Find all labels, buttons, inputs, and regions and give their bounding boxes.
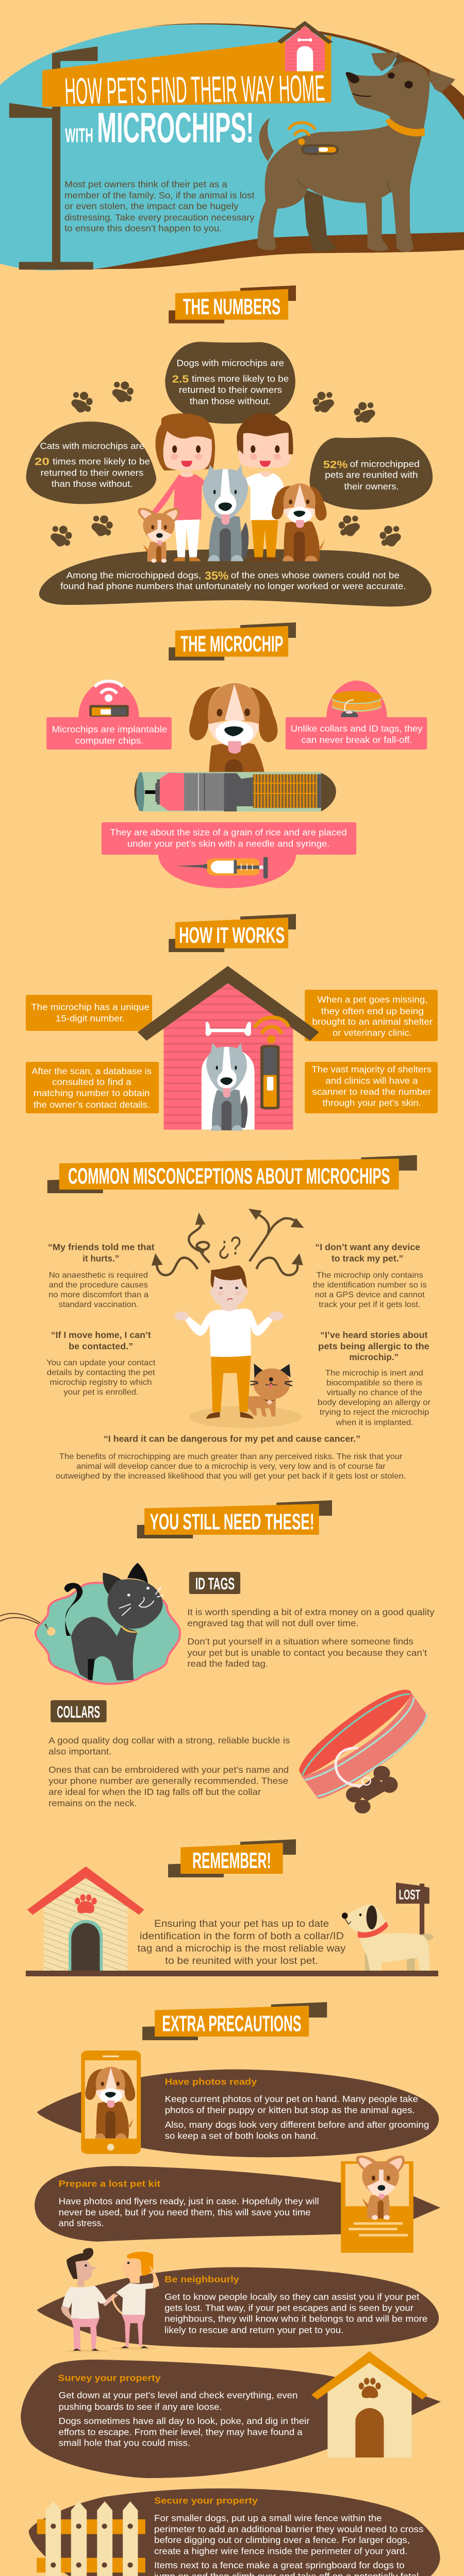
collars label <box>51 1700 107 1722</box>
dogs in family <box>138 465 327 563</box>
step: database: consulted to find a <box>52 1077 132 1087</box>
misconception: it hurts: it hurts.” <box>82 1253 119 1264</box>
stat bubble: reunited <box>309 437 433 510</box>
step: scanners <box>305 1062 438 1113</box>
remember text: tag and a microchip is the most reliable way <box>137 1942 346 1954</box>
misconception: it hurts: and the procedure causes <box>49 1280 148 1290</box>
id tag with cat <box>0 1563 180 1684</box>
lost dog <box>342 1905 434 1971</box>
remember text: identification in the form of both a collar/ID <box>140 1930 344 1941</box>
misconception: it hurts: “My friends told me that <box>48 1242 155 1252</box>
section: the numbers: THE NUMBERS <box>183 294 280 319</box>
remember text: Ensuring that your pet has up to date <box>154 1918 329 1929</box>
family with dogs <box>138 413 327 563</box>
heading: extra precautions <box>142 2002 327 2040</box>
stat bubble: cats: Cats with microchips are <box>40 442 144 451</box>
step: pet goes missing: or veterinary clinic. <box>333 1028 412 1038</box>
tip: be neighbourly <box>37 2248 439 2352</box>
stat bubble: dogs: 2.5 <box>172 374 189 385</box>
misconception: cancer <box>56 1434 406 1481</box>
kennel illustration <box>138 966 319 1131</box>
stat bubble: reunited: their owners. <box>344 482 399 492</box>
misconception: it hurts: no more discomfort than a <box>48 1290 148 1299</box>
collars text: A good quality dog collar with a strong, reliable buckle is <box>48 1735 290 1745</box>
stat bubble: cats: 20 <box>35 456 49 467</box>
man <box>237 413 293 561</box>
stat bubble: reunited: 52% <box>323 459 348 470</box>
tip: have photos ready: so keep a set of both looks on hand. <box>165 2131 319 2141</box>
paw prints <box>51 381 401 547</box>
kennel with paw <box>27 1867 144 1971</box>
stat bubble: dogs: than those without. <box>190 396 271 406</box>
tip: have photos ready <box>37 2050 439 2157</box>
confused arrows <box>152 1209 304 1275</box>
stat bubble: phone numbers: Among the microchipped dogs, <box>67 571 201 581</box>
tip: survey your property: efforts to escape. From their level, they may have found a <box>59 2428 303 2437</box>
id tags text: read the faded tag. <box>187 1658 268 1669</box>
main title <box>64 67 326 151</box>
tip: lost pet kit: and stress. <box>59 2218 104 2228</box>
card: size of a grain of rice <box>102 822 356 888</box>
stat bubble: phone numbers: 35% <box>205 569 228 582</box>
misconception: allergy: microchip.” <box>349 1352 399 1362</box>
tip: secure your property <box>29 2488 440 2576</box>
collars text: remains on the neck. <box>48 1798 137 1808</box>
step: pet goes missing <box>305 990 438 1041</box>
tip: lost pet kit: never be used, but if you need them, this will save you time <box>59 2208 311 2217</box>
card: size of a grain of rice: under your pet’s skin with a needle and syringe. <box>127 839 329 849</box>
stat bubble: dogs: returned to their owners <box>179 385 282 395</box>
cream kennel <box>311 2351 427 2458</box>
stat bubble: dogs <box>165 342 295 424</box>
misconception: it hurts: No anaesthetic is required <box>49 1270 148 1280</box>
stat bubble: cats: returned to their owners <box>41 468 143 478</box>
section: collars: REMEMBER! <box>192 1848 271 1873</box>
id tags text <box>187 1607 435 1669</box>
two neighbours <box>61 2248 159 2352</box>
stat bubble: dogs: Dogs with microchips are <box>177 359 284 368</box>
stat bubble: cats <box>26 421 156 504</box>
id tags label <box>189 1572 240 1594</box>
stat bubble: phone numbers <box>39 549 432 606</box>
section: property tips <box>21 2351 441 2576</box>
misconception: moving home <box>46 1330 156 1397</box>
lost flyer <box>341 2156 413 2253</box>
misconception: moving home: your pet is enrolled. <box>63 1387 139 1397</box>
fence <box>37 2501 145 2576</box>
tip: lost pet kit: Have photos and flyers ready, just in case. Hopefully they will <box>59 2196 319 2207</box>
tip: be neighbourly: Be neighbourly <box>164 2274 239 2284</box>
tip: secure your property: Secure your property <box>154 2496 258 2506</box>
section: the numbers <box>26 285 433 606</box>
misconception: moving home: be contacted.” <box>69 1341 133 1351</box>
section: collars <box>48 1690 427 1877</box>
misconception: it hurts: standard vaccination. <box>59 1300 139 1309</box>
misconception: it hurts <box>48 1242 155 1309</box>
section: misconceptions <box>46 1209 431 1428</box>
signpost <box>9 46 97 269</box>
section: collars: COLLARS <box>57 1703 100 1721</box>
stat bubble: cats: times more likely to be <box>53 457 150 467</box>
hero dog <box>257 53 455 252</box>
tip: lost pet kit <box>35 2156 440 2253</box>
intro text: distressing. Take every precaution necessary <box>64 212 255 223</box>
intro text: or even stolen, the impact can be hugely <box>64 201 239 211</box>
step: database <box>26 1062 159 1113</box>
step: unique number: 15-digit number. <box>56 1013 125 1024</box>
confused arrows: ¿? <box>218 1231 241 1260</box>
stat bubble: dogs: times more likely to be <box>192 374 289 384</box>
intro text: member of the family. So, if the animal is lost <box>64 190 255 200</box>
intro text <box>64 179 255 233</box>
floor <box>26 1971 438 1976</box>
phone with beagle <box>81 2050 141 2154</box>
section: you still need these <box>0 1434 435 1684</box>
ground shadow <box>189 1406 302 1428</box>
collar illustration <box>299 1690 427 1814</box>
misconception: moving home: You can update your contact <box>46 1358 156 1367</box>
collars text: your phone number are generally recommended. These <box>48 1776 288 1786</box>
card: implantable chips <box>46 681 172 750</box>
tip: survey your property <box>21 2351 441 2478</box>
misconception: allergy <box>318 1330 431 1427</box>
section: remember: LOST <box>399 1887 420 1902</box>
section: how it works <box>26 966 438 1193</box>
tip: survey your property: Dogs sometimes have all day to look, poke, and dig in their <box>59 2416 309 2426</box>
collars text: Ones that can be embroidered with your pet’s name and <box>48 1765 289 1775</box>
step: database: matching number to obtain <box>34 1088 150 1098</box>
section: you still need these: ID TAGS <box>195 1574 235 1593</box>
remember text <box>137 1918 346 1966</box>
collars text <box>48 1735 290 1808</box>
tip: survey your property: Get down at your pet’s level and check everything, even <box>59 2391 297 2400</box>
step: unique number <box>26 995 152 1031</box>
misconception: allergy: when it is implanted. <box>336 1418 413 1427</box>
confused man <box>175 1265 284 1419</box>
misconception: moving home: “If I move home, I can’t <box>51 1330 151 1340</box>
microchip signal on dog <box>289 123 339 155</box>
kennel icon <box>277 21 333 71</box>
collars text: also important. <box>48 1747 111 1757</box>
beagle illustration <box>189 683 277 806</box>
step: database: the owner’s contact details. <box>34 1099 150 1110</box>
stat bubble: reunited: of microchipped <box>350 460 420 469</box>
main title: WITH <box>65 124 93 147</box>
remember text: to be reunited with your lost pet. <box>165 1955 318 1966</box>
sky blob <box>0 24 464 270</box>
tip: lost pet kit: Prepare a lost pet kit <box>59 2179 161 2189</box>
card: implantable chips: Microchips are implantable <box>52 724 167 735</box>
intro text: Most pet owners think of their pet as a <box>64 179 228 190</box>
card: collars comparison <box>286 681 427 750</box>
woman <box>151 413 215 561</box>
tip: survey your property: Survey your property <box>58 2373 161 2383</box>
orange cat <box>248 1364 292 1417</box>
step: database: After the scan, a database is <box>31 1066 152 1076</box>
heading: you still need these <box>137 1500 332 1538</box>
heading: the numbers <box>169 285 296 324</box>
hero panel <box>0 21 464 270</box>
misconception: moving home: details by contacting the pet <box>47 1368 155 1377</box>
stat bubble: cats: than those without. <box>52 479 133 489</box>
section: the microchip <box>46 622 427 806</box>
card: implantable chips: computer chips. <box>75 736 143 746</box>
heading: common misconceptions <box>47 1155 417 1193</box>
icon: syringe <box>176 857 268 878</box>
heading: how it works <box>169 914 296 952</box>
tip: be neighbourly: likely to rescue and return your pet to you. <box>164 2325 343 2335</box>
section: remember <box>26 1867 439 2157</box>
heading: remember <box>168 1839 296 1877</box>
tip: have photos ready: Have photos ready <box>165 2077 257 2087</box>
tip: survey your property: small hole that you could miss. <box>59 2438 190 2448</box>
heading: the microchip <box>169 622 296 660</box>
title banner <box>42 36 331 107</box>
brown ring and ground <box>93 23 464 269</box>
intro text: to ensure this doesn’t happen to you. <box>64 223 222 233</box>
misconception: moving home: microchip registry to which <box>49 1378 152 1387</box>
tip: survey your property: pushing boards to see if any are loose. <box>59 2402 222 2412</box>
misconception: tracking <box>313 1242 427 1309</box>
misconception: tracking: to track my pet.” <box>332 1253 403 1264</box>
collars text: are ideal for when the ID tag falls off but the collar <box>48 1787 261 1797</box>
step: unique number: The microchip has a unique <box>31 1002 150 1012</box>
lost sign <box>396 1883 429 1937</box>
microchip cross-section <box>102 772 356 952</box>
section: tips <box>35 2156 440 2352</box>
id tags text: engraved tag that will not dull over time. <box>187 1618 359 1629</box>
